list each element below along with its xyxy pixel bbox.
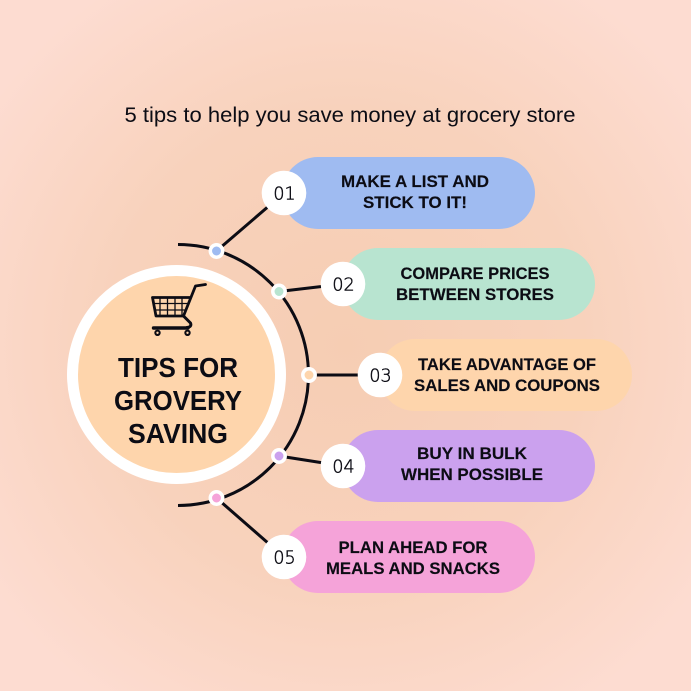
number 5 bbox=[262, 535, 306, 579]
number 5: 05 bbox=[273, 548, 296, 568]
connector 4 bbox=[279, 456, 343, 466]
label 5: PLAN AHEAD FOR bbox=[338, 538, 488, 557]
panel: central circle bbox=[72, 270, 280, 478]
label 2 bbox=[396, 264, 554, 304]
pill 1 bbox=[282, 157, 535, 229]
tip 4 bbox=[273, 430, 595, 502]
label 2: COMPARE PRICES bbox=[400, 264, 550, 283]
number 4 bbox=[321, 444, 365, 488]
central heading: GROVERY bbox=[114, 385, 242, 416]
label 1: MAKE A LIST AND bbox=[341, 172, 489, 191]
label 1 bbox=[341, 172, 489, 212]
node 4 bbox=[273, 450, 285, 462]
node 5 bbox=[210, 492, 223, 504]
tip 1 bbox=[210, 157, 535, 257]
pill 2 bbox=[342, 248, 595, 320]
tip 2 bbox=[273, 248, 595, 320]
pill 5 bbox=[282, 521, 535, 593]
number 1 bbox=[262, 171, 306, 215]
label 4: WHEN POSSIBLE bbox=[401, 465, 543, 484]
title: 5 tips to help you save money at grocery store bbox=[124, 104, 576, 127]
number 3 bbox=[358, 353, 402, 397]
label 5: MEALS AND SNACKS bbox=[326, 559, 500, 578]
node 3 bbox=[303, 369, 315, 381]
label 5 bbox=[326, 538, 500, 578]
pill 4 bbox=[342, 430, 595, 502]
number 1: 01 bbox=[273, 184, 296, 204]
tip 5 bbox=[210, 492, 535, 593]
pill 3 bbox=[379, 339, 632, 411]
node 2 bbox=[273, 285, 285, 298]
label 4 bbox=[401, 444, 543, 484]
label 3: TAKE ADVANTAGE OF bbox=[418, 355, 596, 374]
number 2: 02 bbox=[332, 276, 355, 296]
number 2 bbox=[321, 262, 365, 306]
label 3 bbox=[414, 355, 600, 395]
number 4: 04 bbox=[332, 458, 355, 478]
tip 3 bbox=[303, 339, 632, 411]
connector 2 bbox=[279, 284, 343, 292]
label 2: BETWEEN STORES bbox=[396, 285, 554, 304]
icon: shopping cart bbox=[152, 284, 206, 335]
connector 5 bbox=[216, 498, 284, 557]
central heading: SAVING bbox=[128, 418, 228, 449]
connector 3 bbox=[309, 374, 380, 376]
label 4: BUY IN BULK bbox=[417, 444, 528, 463]
connector arc bbox=[178, 244, 308, 506]
central heading bbox=[114, 352, 242, 449]
connector 1 bbox=[216, 193, 284, 251]
central heading: TIPS FOR bbox=[118, 352, 238, 383]
node 1 bbox=[210, 245, 223, 257]
label 3: SALES AND COUPONS bbox=[414, 376, 600, 395]
label 1: STICK TO IT! bbox=[363, 193, 467, 212]
number 3: 03 bbox=[369, 366, 392, 386]
